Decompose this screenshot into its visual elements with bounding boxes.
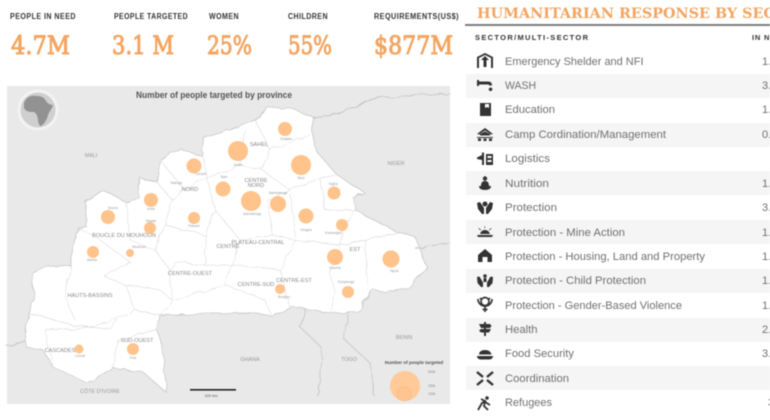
- icon: globe inset: [18, 90, 58, 130]
- stat: people in need: [10, 12, 76, 60]
- scale bar: 100 km: [204, 393, 218, 398]
- row: refugees: [478, 396, 770, 410]
- stat: people targeted: PEOPLE TARGETED: [114, 12, 188, 21]
- row: housing, land and property: Protection - Housing, Land and Property: [505, 251, 706, 263]
- country labels: [80, 153, 412, 395]
- row: education: [480, 103, 770, 116]
- province labels: [75, 137, 399, 360]
- stat: children: CHILDREN: [288, 12, 328, 21]
- region labels: CASCADES: [45, 348, 76, 354]
- stat: women: 25%: [207, 31, 252, 60]
- legend: number of people targeted: 500k: [428, 370, 436, 374]
- region labels: NORD: [248, 183, 264, 189]
- province labels: Banwa: [87, 258, 97, 262]
- panel: humanitarian response table: [465, 6, 770, 410]
- province labels: Poni: [130, 356, 136, 360]
- province labels: Komondjari: [325, 231, 341, 235]
- province bubbles: [74, 122, 400, 355]
- province labels: Oudalan: [280, 137, 292, 141]
- row: camp coordination: Camp Cordination/Management: [505, 129, 666, 141]
- province labels: Tapoa: [390, 269, 399, 273]
- stat: people in need: 4.7M: [11, 31, 70, 60]
- row: health: [479, 322, 770, 336]
- region labels: HAUTS-BASSINS: [67, 293, 113, 299]
- column headers: SECTOR/MULTI-SECTOR: [475, 33, 589, 42]
- province labels: Yatenga: [170, 181, 182, 185]
- row: food security: Food Security: [505, 348, 574, 360]
- country labels: TOGO: [341, 357, 357, 363]
- region labels: NORD: [182, 187, 198, 193]
- row: child protection: Protection - Child Protection: [505, 275, 646, 287]
- row: mine action: Protection - Mine Action: [505, 227, 625, 239]
- row: camp coordination: [477, 128, 770, 141]
- province labels: Gourma: [329, 266, 341, 270]
- legend: number of people targeted: [385, 360, 443, 401]
- row: gender-based violence: Protection - Gender-Based Violence: [505, 300, 682, 312]
- row: coordination: Coordination: [505, 373, 569, 385]
- row: child protection: [477, 274, 770, 287]
- column headers: [475, 33, 770, 42]
- row: coordination: [477, 372, 569, 385]
- row: logistics: [477, 152, 551, 165]
- province labels: Boulgou: [278, 295, 290, 299]
- province labels: Gnagna: [300, 228, 312, 232]
- panel: province map: [7, 86, 450, 404]
- region labels: SAHEL: [250, 142, 268, 148]
- row: WASH: [477, 80, 770, 92]
- province labels: Kompienga: [338, 280, 354, 284]
- row: food security: [477, 348, 770, 360]
- region labels: PLATEAU-CENTRAL: [231, 240, 285, 246]
- province labels: Kossi: [147, 207, 155, 211]
- row: emergency shelter: Emergency Shelder and NFI: [505, 56, 644, 68]
- row: health: Health: [505, 324, 538, 336]
- province labels: Passoré: [188, 224, 200, 228]
- province labels: Loroum: [196, 172, 207, 176]
- region labels: CENTRE: [244, 178, 268, 184]
- province labels: Sanmatenga: [243, 212, 261, 216]
- legend: number of people targeted: 250k: [428, 384, 436, 388]
- neighbouring borders: [7, 93, 450, 397]
- stat: requirements: REQUIREMENTS(US$): [374, 12, 459, 21]
- country labels: BENIN: [396, 335, 412, 341]
- country labels: GHANA: [240, 357, 260, 363]
- region labels: CENTRE: [216, 244, 240, 250]
- scale bar: [190, 389, 236, 398]
- stat: children: [288, 12, 332, 60]
- country labels: CÔTE D'IVOIRE: [80, 388, 120, 395]
- map title: Number of people targeted by province: [136, 90, 292, 101]
- region labels: [45, 142, 361, 354]
- row: nutrition: Nutrition: [505, 178, 549, 190]
- stat: women: WOMEN: [209, 12, 239, 21]
- row: logistics: Logistics: [505, 153, 551, 165]
- country labels: NIGER: [387, 161, 405, 167]
- region labels: BOUCLE DU MOUHOUN: [92, 233, 156, 239]
- province labels: Sourou: [108, 206, 118, 210]
- row: protection: Protection: [505, 202, 557, 214]
- stat: people targeted: [112, 12, 188, 60]
- row: nutrition: [479, 176, 770, 190]
- region labels: CENTRE-EST: [276, 278, 312, 284]
- row: gender-based violence: [478, 298, 770, 312]
- province labels: Nayala: [146, 219, 156, 223]
- province labels: Yagha: [329, 182, 338, 186]
- row: protection: [477, 202, 770, 214]
- row: WASH: WASH: [505, 80, 536, 92]
- province labels: Séno: [297, 176, 305, 180]
- province labels: Soum: [234, 163, 243, 167]
- row: housing, land and property: [478, 249, 770, 263]
- province labels: Namentenga: [269, 191, 287, 195]
- map: Burkina Faso provinces: [25, 108, 427, 393]
- legend: number of people targeted: Number of people targeted: [385, 360, 443, 365]
- province labels: Comoé: [75, 354, 85, 358]
- country labels: MALI: [85, 153, 97, 159]
- province labels: Bam: [221, 175, 228, 179]
- row stripes: [466, 74, 770, 390]
- stat: children: 55%: [288, 31, 332, 60]
- stat: people in need: PEOPLE IN NEED: [10, 12, 76, 21]
- province labels: Mouhoun: [132, 245, 146, 249]
- row: emergency shelter: [477, 53, 770, 68]
- region labels: CENTRE-SUD: [238, 282, 274, 288]
- region labels: CENTRE-OUEST: [168, 271, 213, 277]
- row: refugees: Refugees: [505, 397, 552, 409]
- stat: women: [207, 12, 252, 60]
- region labels: SUD-OUEST: [121, 338, 154, 344]
- region labels: EST: [350, 247, 361, 253]
- legend: number of people targeted: 100k: [428, 392, 436, 396]
- stat: requirements: $877M: [374, 31, 453, 60]
- row: mine action: [477, 226, 770, 239]
- row: education: Education: [505, 104, 555, 116]
- stat: people targeted: 3.1 M: [112, 31, 174, 60]
- stat: requirements: [374, 12, 459, 60]
